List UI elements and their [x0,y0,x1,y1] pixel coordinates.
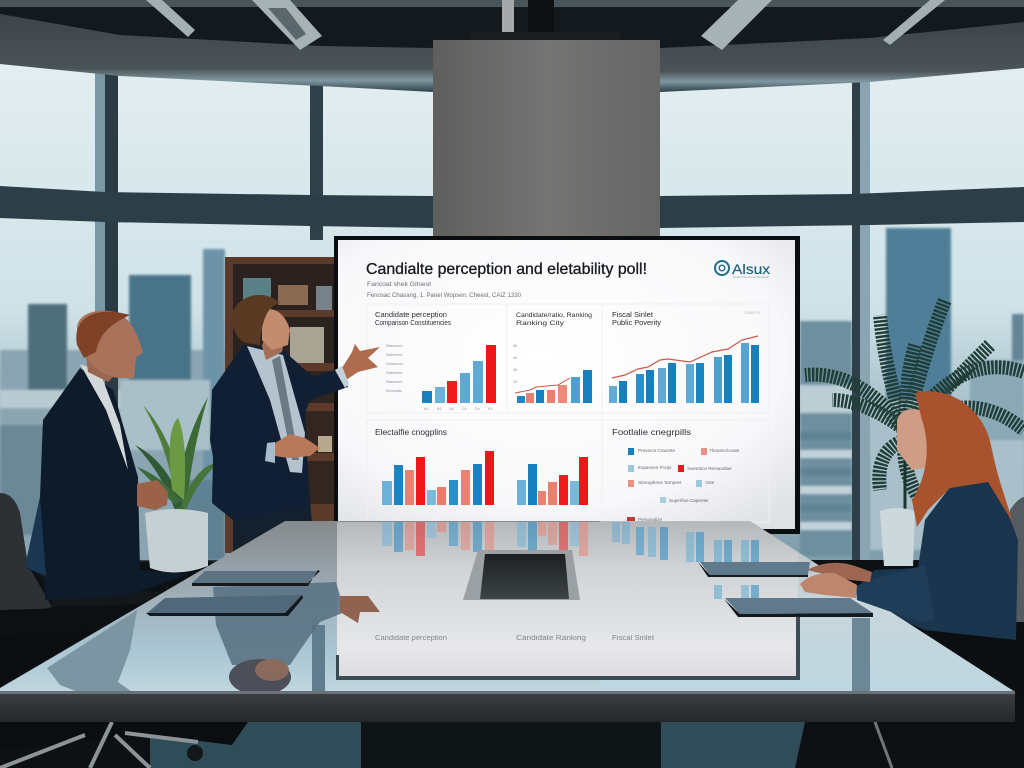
window panes with skyline [0,55,1024,560]
legend panel: Theatreclocate [709,448,740,453]
chart 3: fiscal series [609,310,761,403]
chart 2: candidate ranking: 30 [513,368,517,372]
legend panel: Vote [705,480,715,485]
folders on table [146,562,873,617]
table centre hatch [463,550,580,600]
legend panel: Expanses Prorjs [638,465,672,470]
logo [715,261,770,279]
screen title: Candialte perception and eletability poll! [366,261,647,278]
chart 4: lower-left bars [382,451,494,505]
man left [25,311,190,600]
city skyline left [0,249,335,560]
chart 2: candidate ranking: 10 [513,380,517,384]
central column [433,40,660,238]
reflection of colleague [47,610,137,692]
city skyline right [800,228,1024,556]
table front edge [0,691,1015,722]
left chair [0,493,160,688]
chart 1: candidate perception [375,310,496,411]
chart 1: candidate perception: Candidate perception [375,310,447,319]
ceiling and soffit [0,0,1024,92]
chart 2: candidate ranking [513,312,592,403]
legend panel: Personalize [638,517,662,522]
chart 5: lower-middle bars [517,457,588,505]
window mullion reflections [312,618,870,692]
screen reflection in table [336,522,800,680]
presentation screen [334,236,800,534]
chart 1: candidate perception: CA [462,407,467,411]
chart 3: fiscal series: CHARTS [744,310,761,315]
legend panel: Footlalie cnegrpills [612,427,691,437]
legend panel: Superfine Capenter [669,498,709,503]
reflection title fragments: Candidate perception [375,635,447,642]
screen subtitle lines [367,281,521,299]
reflection of presenter [213,582,380,695]
chart 1: candidate perception: BA [437,407,442,411]
chart 1: candidate perception: Statement [386,371,402,375]
legend panel: Strengthens Tempset [638,480,682,485]
window frames [0,60,1024,560]
chart 1: candidate perception: DA [475,407,480,411]
chart 1: candidate perception: Comparison Constituencies [375,318,451,327]
woman torso and hair [856,391,1018,640]
chart 1: candidate perception: Electorate [386,389,402,393]
legend panel: Sweettice Remanditer [687,466,732,471]
under-table chairs and legs [0,722,1024,768]
right chair [920,497,1024,695]
conference table [0,521,1015,695]
chart 1: candidate perception: Statement [386,344,402,348]
chart 1: candidate perception: AA [424,407,429,411]
chart 3: fiscal series: Public Poverity [612,318,661,327]
chart 1: candidate perception: Statement [386,353,402,357]
logo: Alsux [732,261,770,277]
reflection title fragments [375,635,654,642]
chart 1: candidate perception: Deciduous [386,362,403,366]
chart 1: candidate perception: NA [449,407,454,411]
chart 1: candidate perception: Statement [386,380,402,384]
plant right [805,300,1024,566]
bookshelf [225,257,335,553]
reflection title fragments: Candidate Ranking [516,635,586,642]
legend panel [612,427,740,522]
screen subtitle lines: Fancoat shek Gitsest [367,281,431,288]
woman's arm and hands [800,563,935,622]
plant left [135,397,220,573]
lower-left panel heading: Electalfie cnogplins [375,427,447,437]
reflection title fragments: Fiscal Sinlet [612,635,654,642]
chart panels outline [367,304,769,522]
chart 2: candidate ranking: 40 [513,356,517,360]
legend panel: Prevercs Cravorte [638,448,675,453]
chart 3: fiscal series: Fiscal Sinlet [612,310,654,319]
chart 1: candidate perception: EA [488,407,493,411]
screen subtitle lines: Fenosac Chasang, 1. Panel Wopsen. Cheest, CAIZ 1330 [367,292,521,299]
logo: Media Data Group Research [733,275,769,279]
chart 2: candidate ranking: Ranking City [516,320,565,327]
man center [210,295,380,552]
chart 2: candidate ranking: 50 [513,344,517,348]
chart 2: candidate ranking: Candidate/ratio, Ranking [516,312,592,319]
